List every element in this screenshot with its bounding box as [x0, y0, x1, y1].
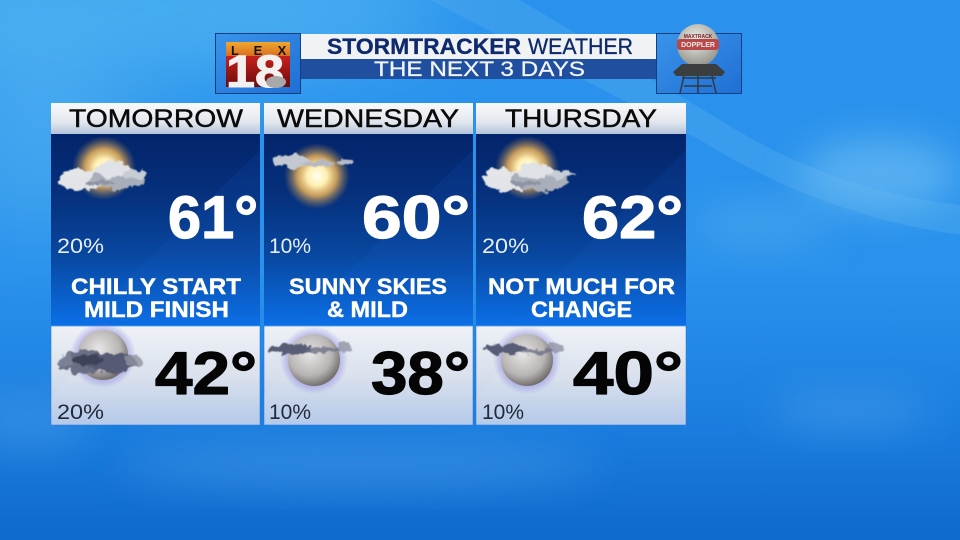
low temperature: 42°: [155, 340, 257, 407]
forecast text: & MILD: [327, 297, 408, 322]
icon: moon with thin cloud: [269, 326, 351, 394]
subtitle bar: blue: [300, 58, 656, 81]
title bar: white: WEATHER: [528, 34, 633, 59]
precipitation chance: 10%: [482, 401, 524, 424]
header banner: [216, 24, 742, 97]
forecast text: SUNNY SKIES: [289, 274, 447, 299]
precipitation chance: 20%: [57, 235, 104, 258]
logo: doppler radar tower: DOPPLER: [681, 42, 715, 49]
night section: [264, 326, 473, 425]
title bar: white: STORMTRACKER: [327, 34, 521, 59]
forecast text: [289, 274, 447, 322]
forecast text: CHANGE: [531, 297, 632, 322]
forecast text: MILD FINISH: [84, 297, 229, 322]
logo: LEX 18: E: [254, 43, 263, 58]
heading: Tomorrow: [51, 103, 260, 134]
icon: sun with thin cloud: [274, 143, 353, 209]
high temperature: 62°: [582, 184, 683, 251]
logo: doppler radar tower: [656, 24, 742, 94]
heading: Wednesday: WEDNESDAY: [277, 105, 459, 133]
precipitation chance: 20%: [57, 401, 104, 424]
logo: LEX 18: [216, 34, 300, 97]
heading: Wednesday: [264, 103, 473, 134]
logo: LEX 18: L: [231, 43, 239, 58]
logo: LEX 18: 18: [226, 46, 284, 97]
heading: Thursday: THURSDAY: [505, 105, 657, 133]
day section: [51, 134, 260, 325]
high temperature: 61°: [168, 184, 258, 251]
low temperature: 38°: [371, 340, 470, 407]
precipitation chance: 10%: [269, 235, 311, 258]
title bar: white: [300, 34, 656, 59]
night section: [51, 322, 260, 425]
icon: sun behind cloud: [59, 136, 148, 200]
subtitle bar: blue: THE NEXT 3 DAYS: [374, 58, 585, 81]
night section: [476, 326, 686, 425]
icon: moon with thin cloud: [484, 326, 563, 394]
icon: sun behind cloud: [483, 136, 573, 200]
logo: doppler radar tower: MAXTRACK: [684, 34, 713, 40]
low temperature: 40°: [573, 340, 683, 407]
logo: LEX 18: X: [278, 43, 287, 58]
panel: Wednesday: [264, 103, 473, 425]
forecast text: [488, 274, 675, 322]
heading: Tomorrow: TOMORROW: [69, 105, 243, 133]
precipitation chance: 20%: [482, 235, 529, 258]
panel: Tomorrow: [51, 103, 260, 425]
heading: Thursday: [476, 103, 686, 134]
forecast text: NOT MUCH FOR: [488, 274, 675, 299]
day section: [264, 134, 473, 325]
day section: [476, 134, 686, 325]
precipitation chance: 10%: [269, 401, 311, 424]
panel: Thursday: [476, 103, 686, 425]
icon: moon behind dark cloud: [58, 322, 144, 388]
forecast text: CHILLY START: [71, 274, 242, 299]
high temperature: 60°: [362, 184, 470, 251]
forecast text: [71, 274, 242, 322]
